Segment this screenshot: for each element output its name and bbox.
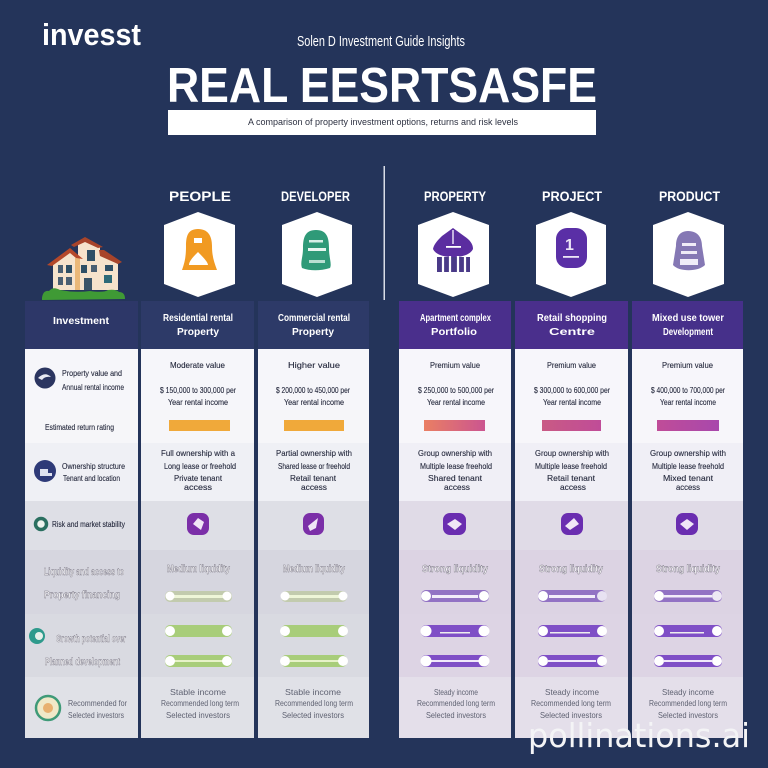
panel: column two: Selected investors [282,710,344,720]
pill [165,655,232,667]
pill [420,625,490,637]
panel: column two: Stable income [285,687,341,697]
panel: column two: Commercial rental [278,313,350,324]
panel: column four: Retail shopping [537,313,607,324]
panel: criteria column: Property financing [44,590,120,601]
panel: column two [258,301,369,738]
column labels: PROJECT [542,189,603,204]
column labels [169,189,721,204]
hexagon icon: purple number: 1 [565,237,574,254]
panel: column one: Private tenant [174,473,223,483]
pill [165,591,232,602]
panel: column one: Property [177,327,219,338]
column labels: PEOPLE [169,189,231,204]
panel: column four [515,301,628,738]
subtitle banner [168,110,596,135]
icon: risk badge [561,513,583,535]
panel: column three: Portfolio [431,327,477,338]
panel: column five [632,301,743,738]
pill [420,655,490,667]
panel: column one: Full ownership with a [161,448,235,458]
panel: column three: Group ownership with [418,448,492,458]
column labels: DEVELOPER [281,189,350,204]
panel: column five: access [676,482,700,492]
panel: column two: Property [292,327,334,338]
panel: column five: Mixed tenant [663,473,714,483]
rating bar [284,420,344,431]
panel: column five: Premium value [662,360,713,370]
panel: column two: Partial ownership with [276,448,352,458]
panel: column three: Recommended long term [417,698,495,708]
panel: column one: access [184,482,212,492]
panel: column two: Year rental income [284,397,344,407]
subtitle banner: A comparison of property investment options, returns and risk levels [248,117,518,127]
rating bar [657,420,719,431]
panel: column five: Strong liquidity [656,564,720,575]
panel: column one: Long lease or freehold [164,461,236,471]
panel: column two: Recommended long term [275,698,353,708]
panel: column three: Multiple lease freehold [420,461,492,471]
icon: criteria five [36,696,60,720]
panel: column four: Centre [549,327,596,338]
icon: risk badge [676,513,698,535]
panel: criteria column: Annual rental income [62,382,124,392]
pill [538,590,607,602]
panel: column two: $ 200,000 to 450,000 per [276,385,350,395]
rating bar [542,420,601,431]
kicker text: Solen D Investment Guide Insights [297,33,465,50]
pill [165,625,232,637]
icon: house [42,237,125,300]
pill [538,625,607,637]
panel: column one: Selected investors [166,710,230,720]
panel: column three: Apartment complex [420,313,491,324]
pill [654,655,722,667]
panel: column three [399,301,511,738]
panel: column five: Multiple lease freehold [652,461,724,471]
panel: criteria column: Investment [53,316,110,327]
panel: column one [141,301,254,738]
panel: column three: $ 250,000 to 500,000 per [418,385,494,395]
panel: column one: Residential rental [163,313,233,324]
panel: column four: Year rental income [543,397,601,407]
panel: column four: Strong liquidity [539,564,603,575]
panel: column four: Selected investors [540,710,602,720]
hexagon icon: purple number [536,212,606,297]
panel: column two: Retail tenant [290,473,337,483]
hexagon icon: purple house [418,212,489,297]
icon: criteria two [34,460,56,482]
panel: column four: Premium value [547,360,596,370]
panel: column five: Selected investors [658,710,718,720]
panel: column five: Development [663,327,714,338]
panel: column four: Recommended long term [531,698,611,708]
rating bar [424,420,485,431]
panel: column three: Strong liquidity [422,564,488,575]
pill [538,655,607,667]
panel: column five: Year rental income [660,397,716,407]
panel: column four: Retail tenant [547,473,596,483]
panel: column two: Higher value [288,360,340,370]
watermark: pollinations.ai [528,716,750,755]
icon: criteria one [34,368,56,388]
logo: invesst [42,17,141,52]
panel: column three: Selected investors [426,710,486,720]
pill [280,591,348,602]
panel: column four: access [560,482,586,492]
pill [421,590,489,602]
panel: criteria column: Property value and [62,368,122,378]
panel: column two: Shared lease or freehold [278,461,350,471]
hexagon icon: lavender [653,212,724,297]
center divider [384,166,385,300]
rating bar [169,420,230,431]
hexagon icon: green [282,212,352,297]
panel: criteria column [25,301,138,738]
icon: risk badge [443,513,466,535]
panel: criteria column: Recommended for [68,698,127,708]
panel: column one: Stable income [170,687,226,697]
panel: column four: $ 300,000 to 600,000 per [534,385,610,395]
column labels: PROPERTY [424,189,486,204]
panel: criteria column: Selected investors [68,710,124,720]
panel: column two: Medium liquidity [283,564,345,575]
panel: column five: $ 400,000 to 700,000 per [651,385,725,395]
pill [654,590,722,602]
panel: criteria column: Risk and market stability [52,519,126,529]
panel: column three: Shared tenant [428,473,483,483]
panel: column three: Steady income [434,687,478,697]
panel: column one: Moderate value [170,360,225,370]
icon: risk badge [303,513,324,535]
column labels: PRODUCT [659,189,721,204]
pill [654,625,722,637]
panel: criteria column: Tenant and location [63,473,120,483]
panel: column three: Year rental income [427,397,485,407]
panel: criteria column: Estimated return rating [45,422,114,432]
panel: column four: Steady income [545,687,599,697]
panel: column four: Group ownership with [535,448,609,458]
panel: criteria column: Growth potential over [56,634,126,645]
panel: column four: Multiple lease freehold [535,461,607,471]
icon: criteria four [29,628,45,644]
panel: column three: access [444,482,470,492]
panel: column one: Year rental income [168,397,228,407]
panel: column one: Medium liquidity [167,564,230,575]
panel: column five: Recommended long term [649,698,727,708]
panel: criteria column: Liquidity and access to [44,567,124,578]
panel: criteria column: Ownership structure [62,461,125,471]
hexagon icon: orange [164,212,235,297]
icon: criteria three [36,518,46,530]
title: REAL EESRTSASFE [167,59,597,113]
panel: column five: Group ownership with [650,448,726,458]
panel: column five: Steady income [662,687,714,697]
panel: column three: Premium value [430,360,480,370]
panel: criteria column: Planned development [45,657,120,668]
pill [280,655,348,667]
panel: column two: access [301,482,327,492]
icon: risk badge [187,513,209,535]
panel: column one: Recommended long term [161,698,239,708]
panel: column one: $ 150,000 to 300,000 per [160,385,236,395]
pill [280,625,348,637]
panel: column five: Mixed use tower [652,313,724,324]
